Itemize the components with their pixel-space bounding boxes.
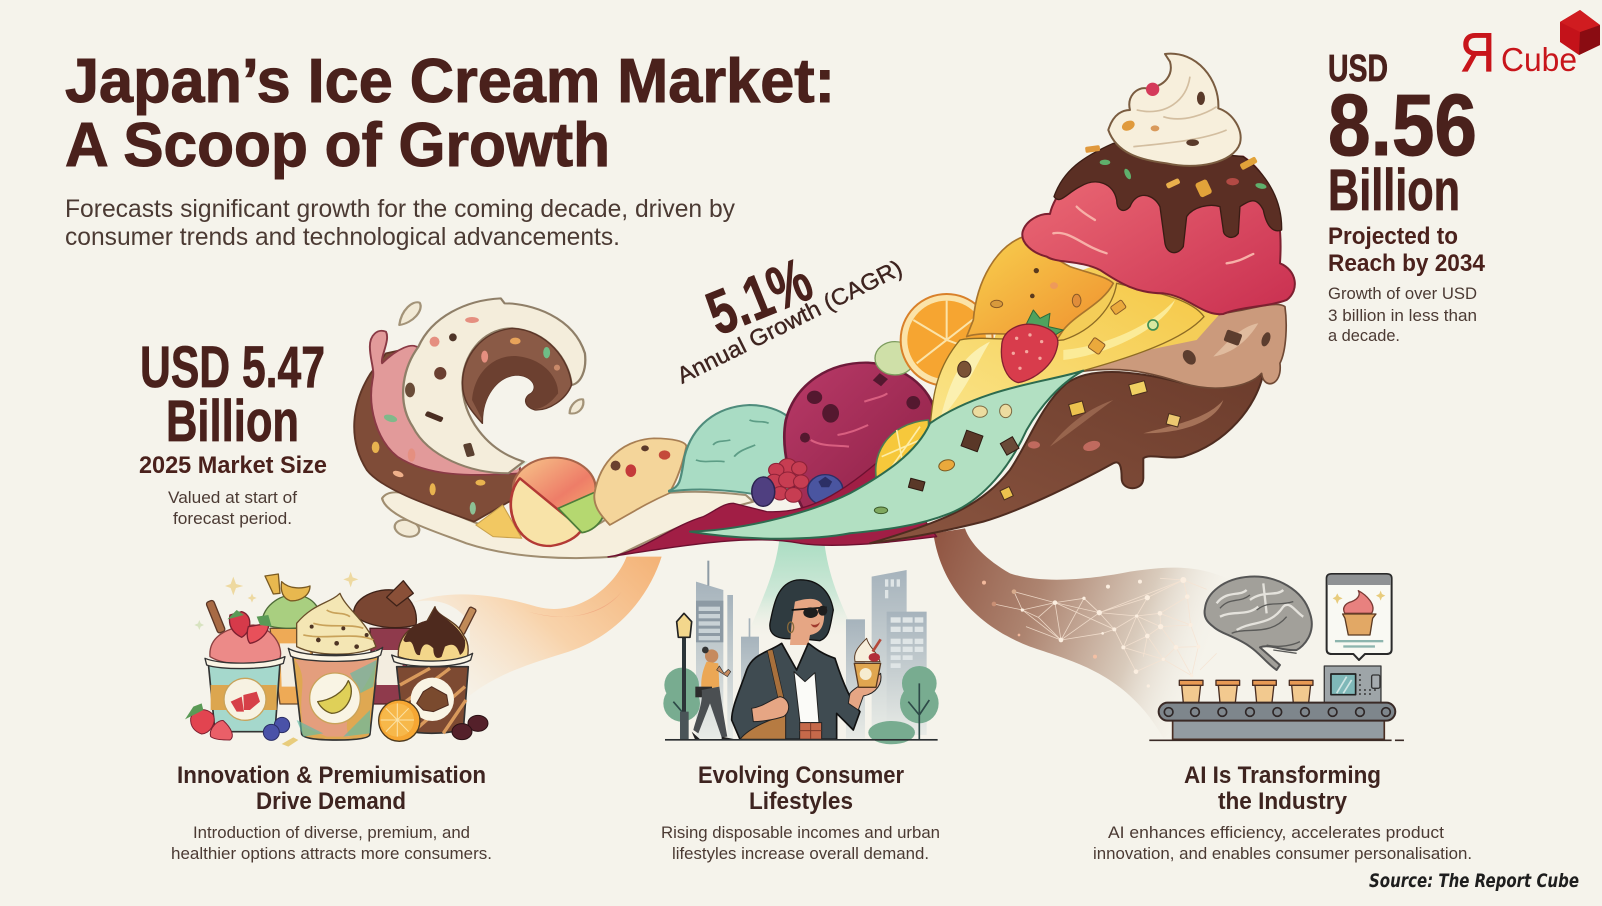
cherries [468,715,488,731]
stat: CAGR: 5.1% [697,245,822,349]
stat: 2034 projection [1328,48,1486,345]
panel: innovation text [171,762,492,863]
apple slice [511,478,582,546]
caramel layer [1080,304,1286,388]
panel: AI text [1093,762,1472,863]
peach [513,458,596,519]
panel: lifestyles text: lifestyles increase overall demand. [672,844,929,863]
panel: innovation text: Introduction of diverse, premium, and [193,823,470,842]
title: Japan’s Ice Cream Market: [65,47,835,116]
cookie scoop [594,438,686,525]
skyline [696,570,927,738]
sauce sprinkles [1085,145,1267,198]
subtitle [65,195,735,251]
illustration: consumer lifestyle [663,561,939,744]
illustration: AI factory [1149,574,1404,740]
chocolate cup [457,607,477,635]
stat: 2034 projection: 8.56 [1328,77,1477,174]
stat: 2034 projection: Reach by 2034 [1328,250,1486,277]
chocolate base layer [870,372,1263,543]
logo [1460,10,1600,83]
network nodes [982,577,1200,688]
yellow layer [930,283,1204,427]
back cups [270,628,313,704]
left cup [206,600,226,634]
brown outer wave [354,347,524,522]
stat: 2034 projection: 3 billion in less than [1328,306,1477,325]
walking person [692,647,735,739]
panel: innovation text: Innovation & Premiumisation [177,762,486,789]
raspberry [766,459,809,502]
chocolate curl [462,328,572,423]
sparkles [194,572,358,630]
logo: Cube [1501,41,1577,78]
cream splash droplets [392,302,583,540]
illustration: ice cream cups [185,572,488,747]
panel: innovation text: healthier options attracts more consumers. [171,844,492,863]
ice cream swirl: left section [354,298,935,558]
arrow: brown flow with AI network [933,528,1237,738]
lemon slice [876,420,929,487]
cream bottom splash [382,492,753,558]
brain [1205,577,1312,670]
yellow chunk [476,505,522,538]
woman [732,580,881,739]
orange slice [901,294,993,386]
strawberry [1001,310,1063,383]
toppings [874,300,1272,514]
stat: 2025 market size: USD 5.47 [140,335,325,400]
yellow backing behind scoops [990,260,1223,363]
trees [663,666,939,744]
crimson ribbon [608,460,937,557]
ground line [665,739,938,741]
stat: CAGR: Annual Growth (CAGR) [673,255,906,388]
machine [1324,666,1381,703]
panel: AI text: AI Is Transforming [1184,762,1381,789]
cups on belt [1179,680,1313,703]
logo: Я [1460,21,1495,83]
orange half [379,700,420,741]
arrow: orange flow to innovation [410,557,662,697]
lime slice behind [875,342,915,375]
panel: lifestyles text: Rising disposable incomes and urban [661,823,940,842]
cream wave [403,298,585,473]
stat: 2025 market size [139,335,327,528]
mint layer [690,371,1083,539]
panel: lifestyles text [661,762,940,863]
network lines [994,578,1217,676]
panel: AI text: the Industry [1218,788,1348,815]
conveyor [1149,703,1404,740]
blueberries [752,477,775,506]
stat: 2025 market size: Valued at start of [168,488,297,507]
panel: AI text: innovation, and enables consumer personalisation. [1093,844,1472,863]
panel: lifestyles text: Evolving Consumer [698,762,904,789]
strawberries front [191,710,214,734]
stat: 2034 projection: a decade. [1328,326,1400,345]
lamp post [677,613,692,740]
pink wave band [370,331,520,475]
ice cream swirl: right section [608,54,1295,557]
stat: 2034 projection: Billion [1328,158,1460,223]
title: A Scoop of Growth [65,111,610,180]
title [65,47,835,180]
stat: 2034 projection: Projected to [1328,223,1458,250]
subtitle: Forecasts significant growth for the coming decade, driven by [65,195,735,223]
cherry and cream toppings [1120,83,1205,146]
lime wedge [558,487,608,533]
panel: AI text: AI enhances efficiency, accelerates product [1108,823,1444,842]
panel: lifestyles text: Lifestyles [749,788,853,815]
mint streak [464,403,528,470]
blueberries [274,717,290,733]
pink scoop [1022,150,1295,314]
arrow: mint flow to lifestyles [747,533,857,637]
stat: 2025 market size: Billion [166,389,299,454]
mint scoop [669,405,788,496]
stat: 2034 projection: Growth of over USD [1328,284,1477,303]
ui card [1327,574,1392,660]
whipped cream [1108,54,1241,166]
stat: 2025 market size: forecast period. [173,509,292,528]
stat: 2034 projection: USD [1328,48,1388,90]
middle cup [297,593,376,654]
panel: innovation text: Drive Demand [256,788,406,815]
berry scoop [784,363,935,509]
subtitle: consumer trends and technological advancements. [65,223,620,251]
sprinkles [372,317,560,515]
orange scoop [967,237,1113,340]
chocolate sauce [1054,143,1282,253]
stat: 2025 market size: 2025 Market Size [139,452,327,479]
